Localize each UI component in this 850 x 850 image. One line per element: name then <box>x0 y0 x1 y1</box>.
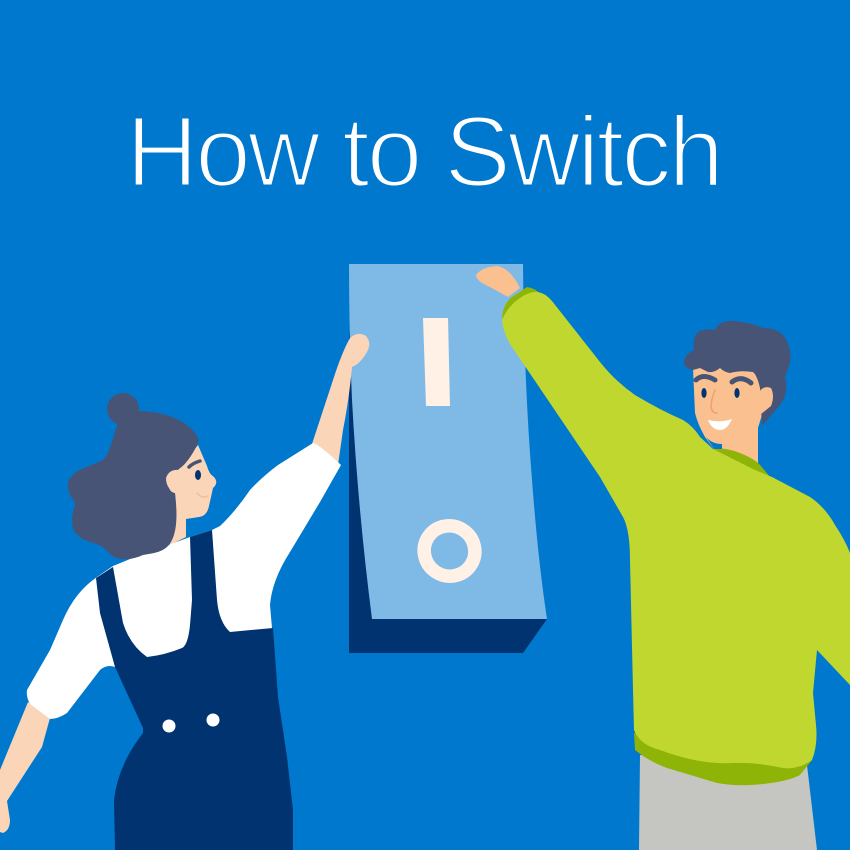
man right eyebrow <box>732 379 751 383</box>
switch base shadow <box>349 330 547 653</box>
sweater collar <box>713 448 771 478</box>
green sweater <box>502 292 850 768</box>
sweater cuff <box>502 287 540 332</box>
man hand <box>476 266 520 297</box>
woman hair <box>68 393 199 559</box>
off symbol: ring <box>414 516 485 586</box>
woman raised arm <box>311 334 369 465</box>
man hair <box>684 321 790 426</box>
man neck and face <box>693 360 768 468</box>
man right eye <box>734 388 740 398</box>
woman navy overalls <box>96 530 293 850</box>
man left eye <box>701 388 707 398</box>
woman eye <box>195 470 201 480</box>
man ear <box>759 387 773 414</box>
rocker switch <box>349 264 547 653</box>
woman eyebrow <box>189 461 200 467</box>
woman white shirt <box>27 443 341 719</box>
man nose <box>711 390 717 413</box>
overall button left <box>162 720 176 732</box>
man figure <box>476 266 850 850</box>
woman lowered arm <box>0 702 50 833</box>
woman smile <box>197 493 208 497</box>
man trousers <box>639 755 817 850</box>
sweater hem rib <box>634 733 812 785</box>
woman ear <box>166 470 184 493</box>
woman neck and face <box>170 445 216 545</box>
blue gap under jaw <box>706 437 722 449</box>
man smile <box>708 419 732 430</box>
man left eyebrow <box>696 376 715 380</box>
title: How to Switch <box>126 96 724 208</box>
woman figure <box>0 334 369 850</box>
on symbol: bar <box>423 318 450 406</box>
switch face <box>349 264 547 619</box>
overall button right <box>206 714 220 726</box>
